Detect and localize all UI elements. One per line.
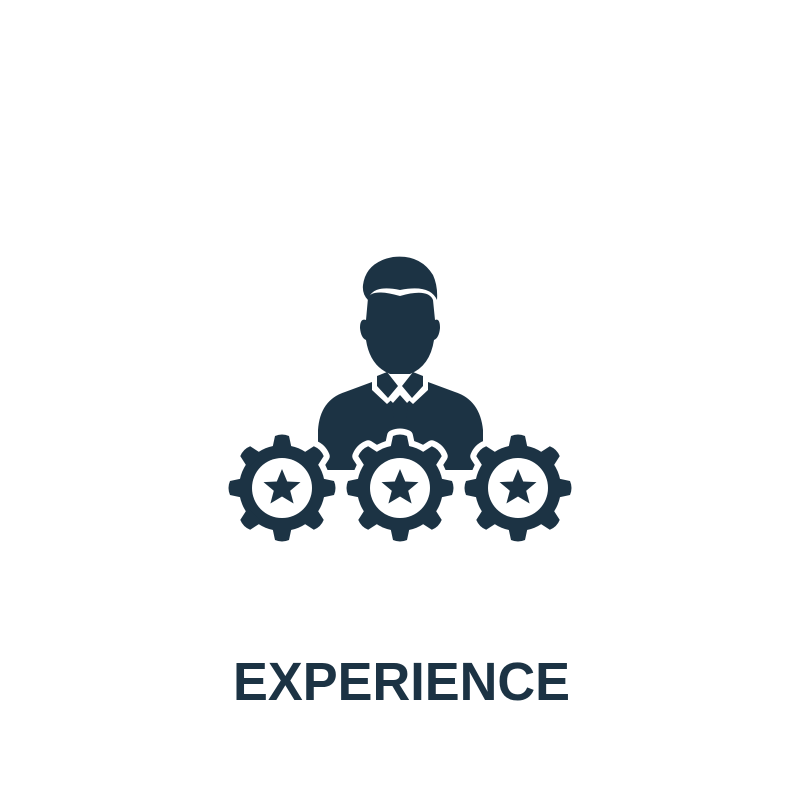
person head [360,257,440,374]
gear left [228,434,336,542]
gear middle [346,434,454,542]
title: EXPERIENCE: EXPERIENCE [233,652,570,712]
person body [318,366,483,470]
icon: businessman with gears [228,257,572,542]
collar and tie [372,366,428,404]
gear right [464,434,572,542]
